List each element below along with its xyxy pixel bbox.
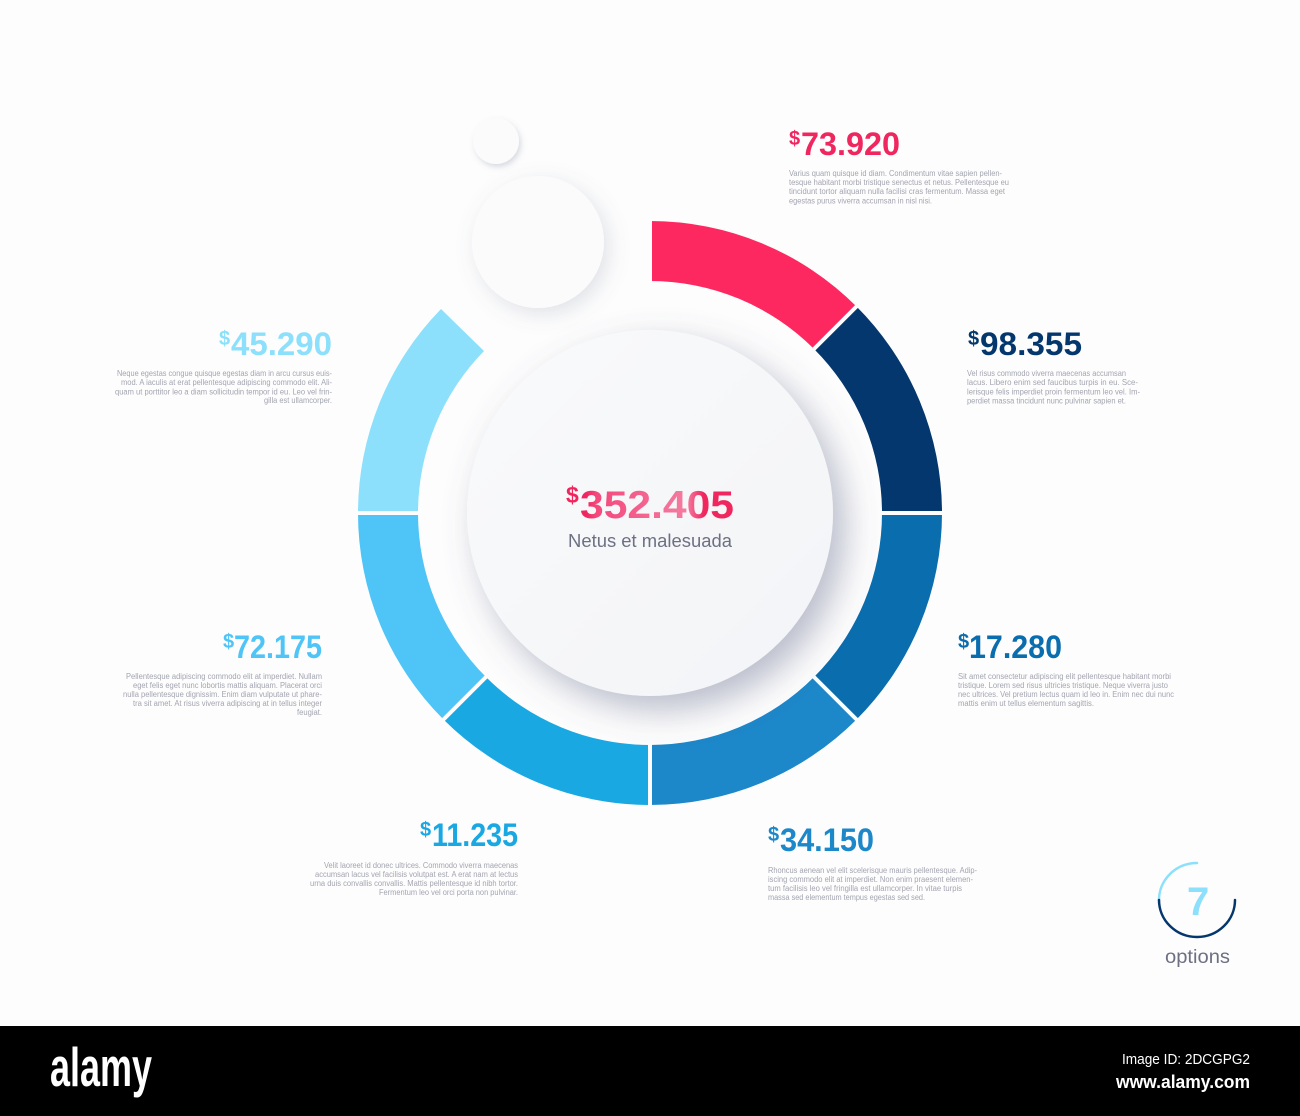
number seven: 7 <box>1187 880 1209 924</box>
callout: 45.290: Neque egestas congue quisque egestas diam in arcu cursus euis- <box>117 369 332 378</box>
center disc <box>467 330 833 696</box>
callout: 72.175 <box>123 629 322 717</box>
icon: progress ring <box>1159 863 1235 937</box>
callout: 73.920: 73.920 <box>801 126 900 162</box>
callout: 17.280: mattis enim ut tellus elementum sagittis. <box>958 699 1094 708</box>
center total <box>566 482 734 551</box>
callout: 11.235: urna duis convallis convallis. Mattis pellentesque id nibh tortor. <box>310 879 518 888</box>
callout: 34.150: Rhoncus aenean vel elit scelerisque mauris pellentesque. Adip- <box>768 866 977 875</box>
callout: 73.920 <box>789 126 1009 206</box>
callout: 72.175: feugiat. <box>297 708 322 717</box>
total amount: 352.405 <box>580 484 734 527</box>
segment: blue 17.280 <box>814 513 942 720</box>
callout: 11.235: $ <box>420 819 431 841</box>
total amount: $ <box>566 482 579 508</box>
callout: 34.150: iscing commodo elit at imperdiet. Non enim praesent elemen- <box>768 875 973 884</box>
callout: 72.175: Pellentesque adipiscing commodo elit at imperdiet. Nullam <box>126 672 322 681</box>
callout: 73.920: egestas purus viverra accumsan in nisl nisi. <box>789 196 932 206</box>
callout: 72.175: $ <box>223 631 234 653</box>
callout: 11.235: Fermentum leo vel orci porta non pulvinar. <box>379 888 518 897</box>
callout: 17.280: $ <box>958 631 969 653</box>
options badge <box>1159 863 1235 968</box>
segment: sky 72.175 <box>358 513 486 720</box>
callout: 72.175: tra sit amet. At risus viverra adipiscing at in tellus integer <box>133 699 322 708</box>
callout: 98.355: $ <box>968 328 979 350</box>
callout: 17.280 <box>958 629 1174 708</box>
callout: 73.920: $ <box>789 128 800 150</box>
small floating circle <box>473 118 519 164</box>
callout: 45.290: quam ut porttitor leo a diam sollicitudin tempor id eu. Leo vel frin- <box>115 388 332 396</box>
large floating circle <box>472 176 604 308</box>
callout: 73.920: Varius quam quisque id diam. Condimentum vitae sapien pellen- <box>789 169 1002 178</box>
callout: 73.920: tincidunt tortor aliquam nulla facilisi cras fermentum. Massa eget <box>789 187 1006 196</box>
callout: 72.175: nulla pellentesque dignissim. Enim diam vulputate ut phare- <box>123 690 322 699</box>
callout: 17.280: nec ultrices. Vel pretium lectus quam id leo in. Enim nec dui nunc <box>958 690 1174 699</box>
options label: options <box>1165 947 1230 968</box>
segment: navy 98.355 <box>814 306 942 513</box>
callout: 45.290 <box>115 326 332 405</box>
segment: pale 45.290 <box>358 309 484 513</box>
callout: 17.280: 17.280 <box>969 629 1062 665</box>
callout: 11.235: Velit laoreet id donec ultrices. Commodo viverra maecenas <box>324 861 518 870</box>
callout: 45.290: mod. A iaculis at erat pellentesque adipiscing commodo elit. Ali- <box>121 378 332 387</box>
callout: 34.150: tum facilisis leo vel fringilla est ullamcorper. In vitae turpis <box>768 884 962 893</box>
callout: 34.150 <box>768 822 977 902</box>
total caption: Netus et malesuada <box>568 531 733 551</box>
callout: 17.280: tristique. Lorem sed risus ultricies tristique. Neque viverra justo <box>958 681 1169 690</box>
callout: 17.280: Sit amet consectetur adipiscing elit pellentesque habitant morbi <box>958 672 1171 681</box>
callout: 45.290: 45.290 <box>231 326 332 362</box>
segment: sky 11.235 <box>444 677 650 805</box>
callout: 98.355: 98.355 <box>980 326 1082 362</box>
footer band <box>0 1026 1300 1116</box>
callout: 11.235: accumsan lacus vel facilisis volutpat est. A erat nam at lectus <box>315 870 518 879</box>
image id: Image ID: 2DCGPG2 <box>1122 1051 1250 1068</box>
callout: 98.355: Vel risus commodo viverra maecenas accumsan <box>967 369 1126 378</box>
alamy logo: alamy <box>50 1036 152 1098</box>
callout: 73.920: tesque habitant morbi tristique senectus et netus. Pellentesque eu <box>789 178 1009 187</box>
donut chart <box>354 215 946 809</box>
segment: red 73.920 <box>650 221 856 349</box>
callout: 98.355 <box>967 326 1140 406</box>
callout: 72.175: eget felis eget nunc lobortis mattis aliquam. Placerat orci <box>133 681 322 690</box>
callout: 45.290: $ <box>219 328 230 350</box>
callout: 34.150: 34.150 <box>780 822 874 858</box>
callout: 45.290: gilla est ullamcorper. <box>264 396 332 405</box>
segment: blue 34.150 <box>650 677 856 805</box>
website: www.alamy.com <box>1115 1072 1250 1092</box>
callout: 98.355: lacus. Libero enim sed faucibus turpis in eu. Sce- <box>967 378 1138 387</box>
callout: 72.175: 72.175 <box>234 629 322 665</box>
callout: 98.355: lerisque felis imperdiet proin fermentum leo vel. Im- <box>967 388 1140 396</box>
callout: 11.235 <box>310 817 518 897</box>
callout: 98.355: perdiet massa tincidunt nunc pulvinar sapien et. <box>967 396 1126 406</box>
callout: 34.150: $ <box>768 824 779 846</box>
callout: 11.235: 11.235 <box>432 817 518 853</box>
callout: 34.150: massa sed elementum tempus egestas sed sed. <box>768 893 925 902</box>
